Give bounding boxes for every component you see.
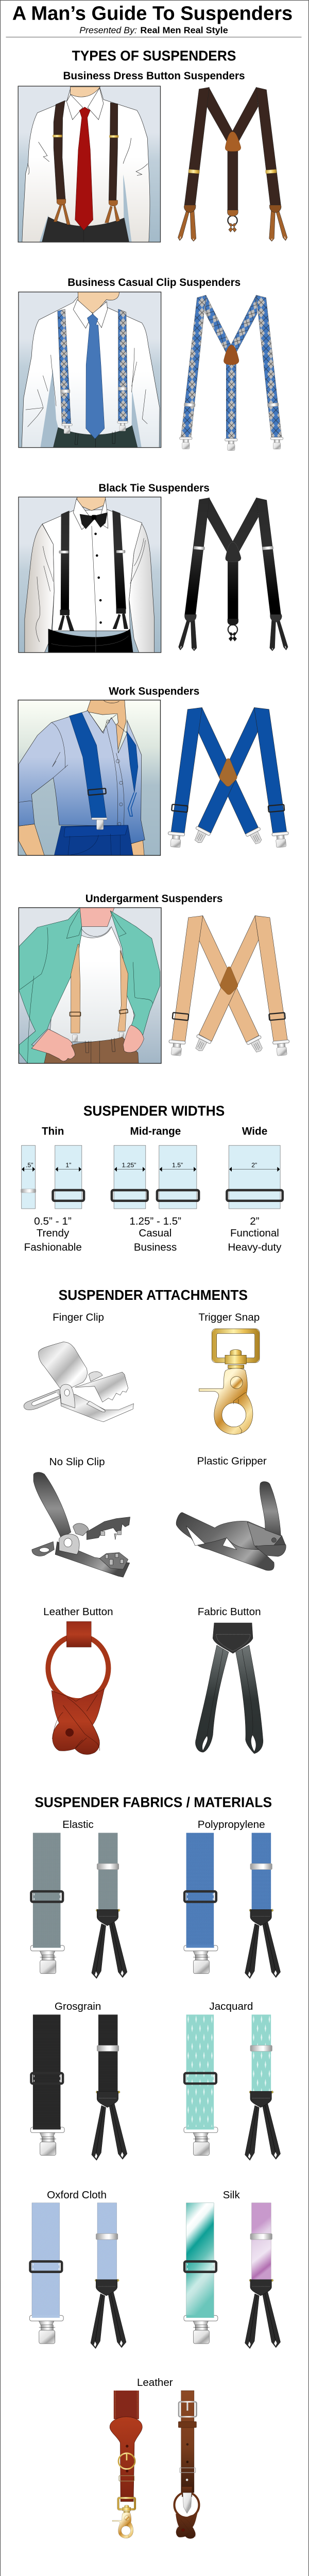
- icon: no slip clip: [32, 1472, 130, 1577]
- suspenders: brown Y-back: [178, 88, 287, 241]
- panel: business casual illustration: [19, 292, 161, 448]
- heading: suspender widths: SUSPENDER WIDTHS: [83, 1103, 225, 1118]
- label: finger clip: Finger Clip: [53, 1311, 104, 1323]
- icon: plastic gripper: [176, 1482, 286, 1570]
- swatch: 1.25 inch: [112, 1145, 148, 1209]
- width column: wide: Wide: [242, 1125, 267, 1138]
- fabric: elastic: Elastic: [62, 1819, 94, 1831]
- shirt studs: [94, 533, 102, 624]
- argyle straps: [58, 309, 128, 426]
- blue tie: [86, 314, 105, 439]
- swatch: 1.5 inch: 1.5”: [172, 1162, 183, 1169]
- heading: types of suspenders: TYPES OF SUSPENDERS: [72, 47, 236, 63]
- fabric: grosgrain: [30, 2001, 127, 2160]
- icon: fabric button: [196, 1623, 263, 1754]
- swatch: half inch: [21, 1145, 36, 1209]
- width column: wide: 2”: [250, 1215, 260, 1227]
- width column: thin: Trendy: [37, 1227, 70, 1239]
- panel: business dress illustration: [18, 86, 160, 242]
- subtitle: Presented By:: [79, 25, 137, 35]
- red tie: [75, 107, 93, 230]
- hands: [31, 1029, 75, 1061]
- fabric: jacquard: [184, 2001, 281, 2160]
- width column: thin: Fashionable: [24, 1242, 82, 1253]
- subtitle: Real Men Real Style: [140, 25, 228, 35]
- swatch: one inch: [53, 1145, 84, 1209]
- width column: thin: [21, 1125, 84, 1253]
- label: plastic gripper: Plastic Gripper: [197, 1455, 267, 1467]
- shoulder straps: [54, 100, 118, 201]
- suspenders: argyle Y-back: [180, 295, 283, 450]
- swatch: one inch: 1”: [65, 1162, 71, 1169]
- suspenders: blue X-back: [167, 707, 289, 848]
- blue strap: [70, 713, 107, 819]
- width column: mid-range: Mid-range: [130, 1125, 181, 1138]
- fabric: grosgrain: Grosgrain: [55, 2001, 101, 2012]
- fabric: jacquard: Jacquard: [209, 2001, 253, 2012]
- subheading: black tie: Black Tie Suspenders: [98, 482, 210, 494]
- fabric: silk: Silk: [223, 2189, 240, 2201]
- width column: thin: Thin: [42, 1125, 64, 1138]
- subheading: business dress button: Business Dress Button Suspenders: [63, 70, 245, 82]
- panel: work illustration: [18, 700, 160, 855]
- fabric: silk: [184, 2189, 281, 2349]
- label: trigger snap: Trigger Snap: [198, 1311, 260, 1323]
- subheading: work: Work Suspenders: [109, 685, 199, 697]
- subheading: undergarment: Undergarment Suspenders: [85, 892, 222, 905]
- panel: undergarment illustration: [19, 908, 161, 1063]
- title: A Man’s Guide To Suspenders: [12, 2, 293, 24]
- swatch: half inch: .5”: [26, 1162, 33, 1169]
- fabric: polypropylene: [184, 1819, 281, 1978]
- swatch: 1.25 inch: 1.25”: [122, 1162, 136, 1169]
- width column: mid-range: 1.25” - 1.5”: [129, 1215, 181, 1227]
- jeans: [54, 825, 133, 855]
- width column: wide: [227, 1125, 283, 1253]
- icon: leather button: [48, 1621, 108, 1754]
- bow tie: [80, 513, 108, 529]
- tan straps: [71, 944, 128, 1033]
- label: no slip clip: No Slip Clip: [49, 1456, 105, 1468]
- fabric: polypropylene: Polypropylene: [198, 1819, 265, 1831]
- fabric: oxford cloth: Oxford Cloth: [47, 2189, 107, 2201]
- suspenders: tan X-back: [168, 916, 290, 1056]
- icon: trigger snap: [199, 1329, 260, 1434]
- label: leather button: Leather Button: [43, 1606, 113, 1618]
- fabric: leather: Leather: [137, 2377, 173, 2388]
- teal shirt: [19, 908, 82, 1063]
- width column: wide: Functional: [230, 1227, 279, 1239]
- label: fabric button: Fabric Button: [198, 1606, 261, 1618]
- fabric: leather: [110, 2377, 199, 2538]
- swatch: 1.5 inch: [157, 1145, 199, 1209]
- subtitle: [79, 25, 228, 35]
- width column: mid-range: [112, 1125, 199, 1253]
- width column: mid-range: Casual: [139, 1227, 171, 1239]
- panel: black tie illustration: [19, 497, 161, 653]
- width column: wide: Heavy-duty: [228, 1242, 282, 1253]
- subheading: business casual clip: Business Casual Clip Suspenders: [67, 276, 241, 289]
- black straps: [61, 510, 126, 610]
- suspenders: black Y-back: [179, 498, 288, 651]
- fabric: oxford cloth: [29, 2189, 126, 2349]
- swatch: two inch: [227, 1145, 283, 1209]
- width column: thin: 0.5” - 1”: [34, 1215, 72, 1227]
- brown trousers: [44, 1037, 139, 1063]
- heading: suspender attachments: SUSPENDER ATTACHMENTS: [59, 1287, 248, 1303]
- width column: mid-range: Business: [134, 1242, 177, 1253]
- swatch: two inch: 2”: [251, 1162, 257, 1169]
- icon: finger clip: [24, 1342, 133, 1422]
- heading: suspender fabrics: SUSPENDER FABRICS / MATERIALS: [35, 1794, 272, 1810]
- fabric: elastic: [30, 1819, 127, 1978]
